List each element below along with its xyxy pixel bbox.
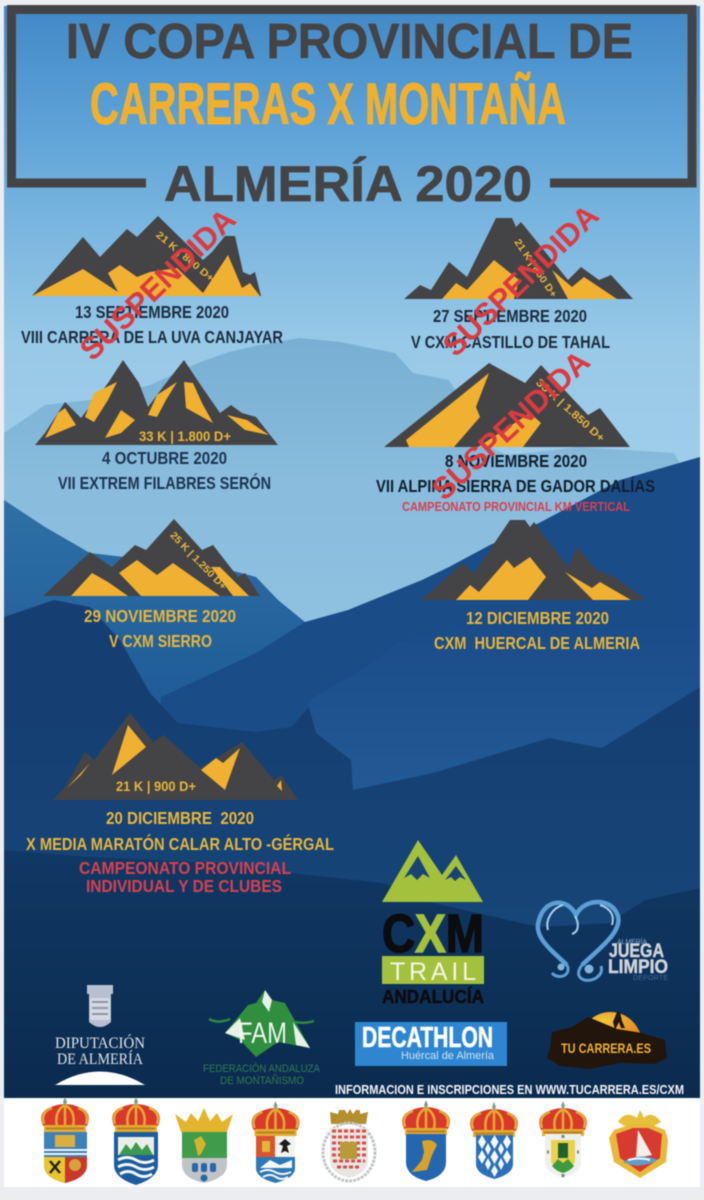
logo: Federacion Andaluza de Montanismo xyxy=(203,990,321,1087)
date: 8 NOVIEMBRE 2020 xyxy=(445,451,587,471)
distance label: 21 K | 850 D+ xyxy=(512,237,559,300)
date: 12 DICIEMBRE 2020 xyxy=(466,608,609,628)
logo: Decathlon xyxy=(355,1022,507,1066)
championship note: CAMPEONATO PROVINCIAL KM VERTICAL xyxy=(402,499,630,514)
logo: Federacion Andaluza de Montanismo: DE MONTAÑISMO xyxy=(220,1074,304,1087)
crest 2 xyxy=(112,1097,160,1185)
race name: CXM HUERCAL DE ALMERIA xyxy=(434,633,640,653)
logo: Federacion Andaluza de Montanismo: FAM xyxy=(238,1017,287,1050)
stamp: suspendida 2: SUSPENDIDA xyxy=(436,198,606,363)
logo: Juega Limpio xyxy=(538,902,668,982)
crest 7 xyxy=(470,1102,518,1179)
logo: Decathlon: Huércal de Almería xyxy=(401,1050,495,1062)
mountain icon 1 xyxy=(32,216,261,296)
championship note xyxy=(79,858,291,896)
logo: Juega Limpio: DEPORTE xyxy=(633,975,668,982)
race name: V CXM SIERRO xyxy=(109,631,212,651)
mountain icon 7 xyxy=(53,713,298,800)
date: 27 SEPTIEMBRE 2020 xyxy=(433,306,587,326)
event: 13 septiembre xyxy=(21,216,283,347)
event: 29 noviembre xyxy=(43,519,260,651)
mountain icon 3 xyxy=(35,360,278,445)
race name: VII ALPINA SIERRA DE GADOR DALÍAS xyxy=(376,475,655,496)
logo: Juega Limpio: ALMERÍA xyxy=(617,937,647,946)
distance label: 25 K | 1.250 D+ xyxy=(167,530,228,593)
distance label: 33 K | 1.800 D+ xyxy=(139,428,231,444)
logo: Tu Carrera xyxy=(547,1012,667,1069)
mountain icon 4 xyxy=(384,363,630,447)
date: 4 OCTUBRE 2020 xyxy=(102,448,227,468)
logo: CXM Trail Andalucia: ANDALUCÍA xyxy=(382,986,484,1007)
race name: VII EXTREM FILABRES SERÓN xyxy=(58,472,271,493)
bottom white crest band xyxy=(4,1098,700,1187)
crest 6 xyxy=(402,1100,450,1181)
event: 8 noviembre xyxy=(376,363,655,514)
stamp: suspendida 1: SUSPENDIDA xyxy=(73,202,243,367)
logo: Juega Limpio: JUEGA xyxy=(609,941,664,962)
crest 4 xyxy=(252,1101,299,1183)
mountain icon 5 xyxy=(43,519,260,596)
mountain landscape background xyxy=(4,338,700,1098)
championship note: CAMPEONATO PROVINCIAL xyxy=(79,858,291,878)
mountain icon 6 xyxy=(420,520,646,600)
event: 4 octubre xyxy=(35,360,278,493)
race name: V CXM CASTILLO DE TAHAL xyxy=(411,332,610,352)
championship note: INDIVIDUAL Y DE CLUBES xyxy=(86,876,282,896)
logo: Diputacion de Almeria: DIPUTACIÓN xyxy=(55,1035,145,1052)
distance label: 33 K | 1.850 D+ xyxy=(533,377,607,445)
logo: Decathlon: DECATHLON xyxy=(362,1022,493,1054)
mountain icon 2 xyxy=(404,218,633,299)
title frame xyxy=(12,10,692,183)
logo: Federacion Andaluza de Montanismo: FEDERACIÓN ANDALUZA xyxy=(203,1062,321,1075)
distance label: 21 K | 800 D+ xyxy=(153,230,216,285)
crest 3 xyxy=(175,1108,233,1183)
race name: VIII CARRERA DE LA UVA CANJAYAR xyxy=(21,327,283,347)
date: 20 DICIEMBRE 2020 xyxy=(106,808,254,828)
logo: Tu Carrera: TU CARRERA.ES xyxy=(561,1040,651,1056)
logo: Diputacion de Almeria: DE ALMERÍA xyxy=(57,1051,144,1068)
title line 1: IV COPA PROVINCIAL DE xyxy=(66,15,633,69)
logo: Juega Limpio: LIMPIO xyxy=(608,957,668,978)
crest 9 xyxy=(609,1110,668,1178)
title line 3: ALMERÍA 2020 xyxy=(164,156,532,212)
logo: CXM Trail Andalucia xyxy=(382,840,484,1007)
event: 27 septiembre xyxy=(404,218,633,352)
crest 1 xyxy=(41,1097,89,1183)
date: 13 SEPTIEMBRE 2020 xyxy=(75,302,229,322)
race name: X MEDIA MARATÓN CALAR ALTO -GÉRGAL xyxy=(26,833,334,854)
crest 8 xyxy=(539,1101,587,1178)
stamp: suspendida 3: SUSPENDIDA xyxy=(425,344,597,507)
distance label: 21 K | 900 D+ xyxy=(116,778,196,794)
event: 20 diciembre xyxy=(26,713,334,896)
crest 5 xyxy=(323,1109,375,1181)
event: 12 diciembre xyxy=(420,520,646,653)
logo: Diputacion de Almeria xyxy=(55,985,145,1085)
logo: CXM Trail Andalucia: TRAIL xyxy=(390,958,476,986)
date: 29 NOVIEMBRE 2020 xyxy=(84,606,236,626)
logo: CXM Trail Andalucia: CXM xyxy=(382,904,484,964)
